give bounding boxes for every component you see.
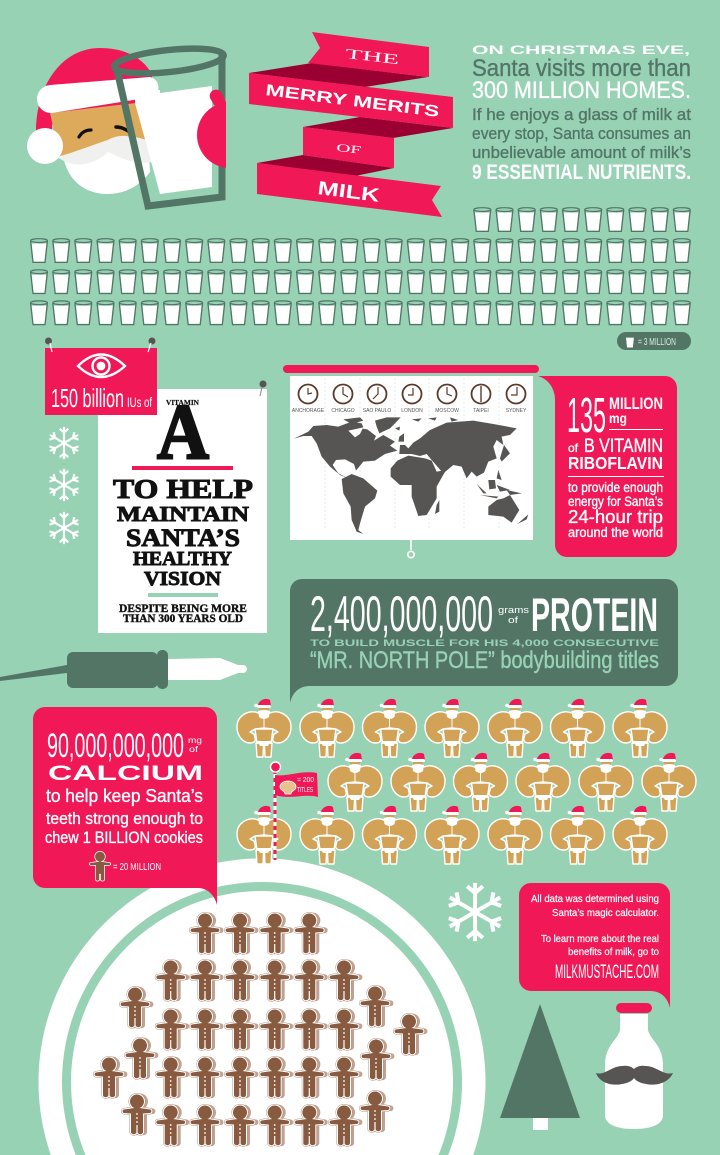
title ribbon: MILK (316, 178, 381, 207)
callout: riboflavin: 135 (567, 389, 606, 443)
plate of cookies (39, 858, 486, 1155)
callout: sources: All data was determined using (531, 893, 659, 905)
callout: calcium: mg (188, 736, 202, 745)
clock labels: LONDON (401, 408, 423, 414)
clock labels: SYDNEY (506, 408, 527, 414)
panel: protein: TO BUILD MUSCLE FOR HIS 4,000 CONSECUTIVE (310, 638, 659, 649)
callout: calcium: 90,000,000,000 (47, 727, 184, 765)
icon: large snowflake (446, 883, 504, 941)
pinned sign: 150 billion IUs: IUs of (127, 394, 152, 410)
world map (294, 417, 528, 534)
clock labels: TAIPEI (473, 408, 489, 414)
clocks (298, 384, 526, 404)
clock labels: SAO PAULO (363, 408, 391, 414)
callout: riboflavin: to provide enough (568, 480, 663, 495)
callout: riboflavin: RIBOFLAVIN (568, 453, 663, 473)
clock labels: ANCHORAGE (292, 408, 325, 414)
legend: one glass equals 3 million (617, 332, 691, 350)
illustration: Santa drinking milk (27, 45, 227, 210)
title ribbon: OF (336, 142, 362, 157)
vitamin A eye chart: DESPITE BEING MORE (119, 603, 247, 615)
callout: sources: To learn more about the real (541, 933, 659, 945)
clock labels: MOSCOW (435, 408, 459, 414)
pinned sign: 150 billion IUs (45, 338, 157, 415)
intro text block: 300 MILLION HOMES. (472, 77, 691, 104)
glass pictogram grid (31, 208, 690, 325)
icon: Christmas tree (500, 1004, 580, 1130)
callout: calcium (33, 707, 217, 905)
intro text block: Santa visits more than (472, 55, 691, 82)
clock labels (292, 408, 527, 414)
callout: calcium: = 20 MILLION (113, 862, 161, 873)
panel: protein: “MR. NORTH POLE” bodybuilding titles (310, 647, 659, 674)
vitamin A eye chart: VITAMIN (166, 399, 199, 407)
vitamin A eye chart (98, 380, 267, 633)
panel: world map with clocks (283, 365, 539, 558)
flag: one icon equals 200 titles: = 200 (297, 777, 314, 784)
panel: protein: grams (498, 605, 530, 615)
callout: riboflavin (538, 376, 677, 557)
callout: sources: Santa’s magic calculator. (552, 907, 659, 919)
callout: calcium: chew 1 BILLION cookies (45, 828, 203, 847)
flag: one icon equals 200 titles: TITLES (297, 787, 313, 794)
callout: riboflavin: B VITAMIN (584, 436, 663, 457)
vitamin A eye chart: HEALTHY (133, 548, 233, 570)
callout: calcium: teeth strong enough to (46, 809, 203, 828)
callout: sources: benefits of milk, go to (568, 946, 659, 958)
title ribbon: MERRY MERITS (264, 82, 441, 121)
cookie pictogram (95, 913, 426, 1145)
callout: riboflavin: of (568, 441, 579, 455)
panel: protein (290, 579, 678, 703)
callout: sources (519, 883, 670, 1008)
vitamin A eye chart: SANTA’S (126, 525, 240, 552)
title ribbon: THE (345, 47, 400, 68)
callout: calcium: to help keep Santa’s (46, 785, 203, 806)
icon: string light bulb (0, 650, 247, 689)
flag: one icon equals 200 titles (270, 762, 318, 860)
icon: three snowflakes (48, 427, 80, 544)
callout: riboflavin: MILLION (609, 394, 663, 413)
title ribbon (249, 32, 453, 217)
intro text block: every stop, Santa consumes an (472, 124, 691, 143)
callout: calcium: CALCIUM (48, 762, 203, 785)
vitamin A eye chart: MAINTAIN (117, 502, 249, 526)
panel: protein: 2,400,000,000 (310, 586, 493, 642)
clock labels: CHICAGO (331, 408, 355, 414)
legend: one glass equals 3 million: = 3 MILLION (638, 337, 676, 348)
icon: milk bottle with moustache (596, 1003, 673, 1129)
intro text block: ON CHRISTMAS EVE, (472, 45, 690, 57)
vitamin A eye chart: A (157, 388, 209, 475)
callout: riboflavin: energy for Santa’s (568, 494, 663, 509)
vitamin A eye chart: THAN 300 YEARS OLD (123, 613, 243, 625)
vitamin A eye chart: VISION (144, 568, 222, 590)
callout: calcium: of (189, 745, 199, 754)
intro text block: If he enjoys a glass of milk at (472, 105, 691, 124)
vitamin A eye chart: TO HELP (113, 474, 253, 504)
intro text block (472, 45, 691, 184)
callout: riboflavin: around the world (568, 525, 663, 540)
pinned sign: 150 billion IUs: 150 billion (51, 383, 124, 413)
callout: riboflavin: 24-hour trip (568, 506, 663, 527)
bodybuilder Santa pictogram (237, 699, 696, 864)
panel: protein: of (508, 615, 519, 625)
intro text block: unbelievable amount of milk’s (472, 143, 691, 162)
callout: riboflavin: mg (609, 410, 627, 426)
